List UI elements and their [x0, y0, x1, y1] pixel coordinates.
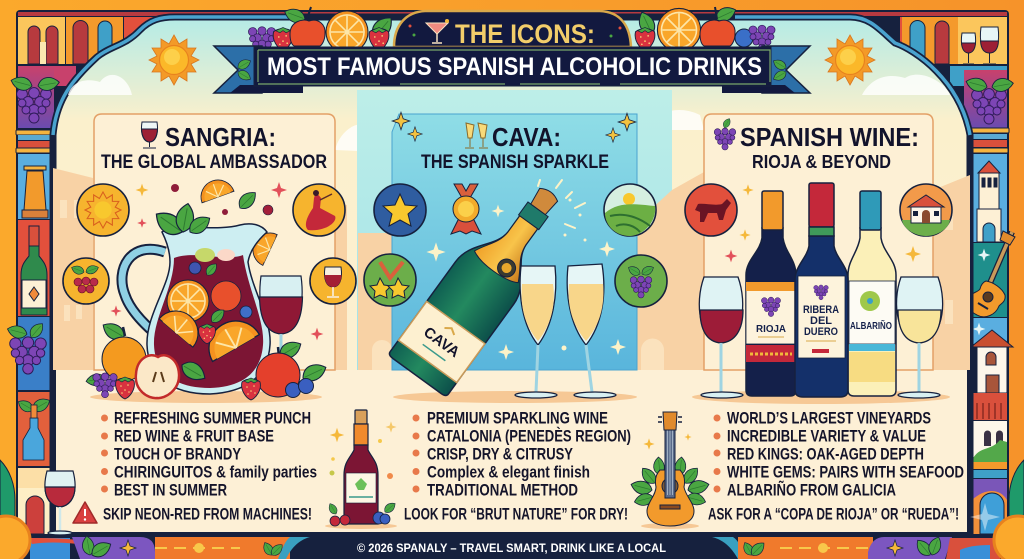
icon: badge house — [900, 184, 952, 236]
heading: spanish wine — [714, 117, 919, 172]
icon: top right wine glasses — [961, 27, 999, 64]
icon: albarino bottle — [848, 191, 896, 396]
icon: ribera bottle — [795, 183, 848, 397]
list: wine bullets — [714, 410, 964, 500]
icon: cava bottle: CAVA — [420, 324, 463, 361]
footer text: © 2026 SPANALY – TRAVEL SMART, DRINK LIKE A LOCAL — [357, 543, 666, 555]
title: ribbon banner: MOST FAMOUS SPANISH ALCOHOLIC DRINKS — [267, 53, 762, 81]
list: cava bullets: CRISP, DRY & CITRUSY — [427, 446, 573, 464]
heading: cava: THE SPANISH SPARKLE — [421, 152, 609, 173]
panel: outer decor left — [0, 460, 1024, 540]
icon: badge glass — [310, 258, 356, 304]
floor — [56, 370, 967, 532]
icon: bell tower — [977, 161, 1001, 242]
icon: fruit top left — [248, 6, 397, 54]
heading: sangria — [101, 122, 327, 173]
icon: sangria wine glass — [260, 276, 302, 352]
icon: guitar with laurels — [629, 412, 710, 529]
icon: watermark sparkle — [970, 503, 1000, 531]
icon: left wine glass — [45, 471, 75, 535]
heading: cava — [421, 122, 609, 173]
list: sangria bullets: BEST IN SUMMER — [114, 482, 227, 500]
icon: sparkles cava — [392, 112, 636, 142]
panel: sangria card — [94, 114, 335, 370]
title: top badge: THE ICONS: — [455, 19, 595, 49]
icon: column — [22, 166, 48, 218]
icon: wine sparkles — [725, 184, 921, 262]
heading: sangria: THE GLOBAL AMBASSADOR — [101, 152, 327, 173]
icon: ribera bottle: RIBERA — [803, 304, 839, 316]
icon: champagne flutes — [465, 123, 488, 148]
heading: spanish wine: RIOJA & BEYOND — [752, 152, 891, 172]
icon: fruit top right — [635, 4, 775, 52]
list: wine bullets: RED KINGS: OAK-AGED DEPTH — [727, 446, 924, 464]
icon: grape bunch — [714, 117, 736, 150]
panel: footer strip — [0, 535, 1024, 559]
icon: gold medal — [451, 184, 481, 234]
heading: cava: CAVA: — [492, 122, 561, 152]
icon: wine glass — [141, 122, 158, 148]
shadows — [90, 390, 950, 404]
icon: corner sun left — [0, 516, 30, 559]
panel: wine card — [704, 114, 933, 370]
icon: red arch tile — [26, 496, 44, 534]
icon: red wine glass — [699, 277, 743, 398]
list: wine bullets: WORLD’S LARGEST VINEYARDS — [727, 410, 931, 428]
callout: sangria tip: SKIP NEON-RED FROM MACHINES! — [103, 506, 312, 524]
icon: left grape tile — [9, 75, 60, 123]
icon: white wine glass — [897, 277, 943, 398]
icon: corner sun right — [994, 516, 1024, 559]
icon: green bottle — [21, 226, 47, 315]
arch trim — [53, 17, 970, 135]
icon: badge bull — [685, 184, 737, 236]
icon: cava bottle — [388, 171, 580, 397]
icon: sun left — [149, 35, 199, 85]
icon: cava spray — [538, 180, 585, 228]
icon: guitar sparkles — [643, 433, 692, 450]
icon: small sangria bottle — [325, 410, 397, 529]
icon: rioja bottle — [746, 191, 796, 396]
list: wine bullets: INCREDIBLE VARIETY & VALUE — [727, 428, 926, 446]
list: cava bullets — [412, 410, 631, 500]
panel: cava card — [392, 114, 637, 370]
list: sangria bullets — [101, 410, 317, 500]
icon: footer leaves left — [81, 535, 285, 559]
icon: warning triangle — [73, 502, 97, 523]
icon: bottle sparkles — [330, 421, 397, 479]
heading: sangria: SANGRIA: — [165, 122, 276, 152]
icon: bush and windows — [972, 430, 1007, 462]
mint leaves — [151, 202, 214, 240]
list: wine bullets: WHITE GEMS: PAIRS WITH SEAFOOD — [727, 464, 964, 482]
icon: badge berries — [63, 258, 109, 304]
callout: cava tip: LOOK FOR “BRUT NATURE” FOR DRY! — [404, 506, 628, 524]
icon: footer leaves right — [741, 535, 944, 559]
list: cava bullets: TRADITIONAL METHOD — [427, 482, 578, 500]
panel: cava background column — [357, 90, 672, 370]
list: wine bullets: ALBARIÑO FROM GALICIA — [727, 480, 896, 500]
icon: plant and blue bottle — [16, 395, 52, 460]
icon: ribera bottle: DUERO — [804, 326, 838, 338]
icon: blue arch door — [980, 493, 1004, 534]
list: sangria bullets: RED WINE & FRUIT BASE — [114, 428, 274, 446]
icon: rioja bottle: RIOJA — [756, 323, 786, 335]
icon: badge star — [374, 184, 426, 236]
list: cava bullets: CATALONIA (PENEDÈS REGION) — [427, 426, 631, 446]
list: sangria bullets: CHIRINGUITOS & family parties — [114, 464, 317, 482]
icon: cocktail glass — [426, 19, 449, 43]
list: sangria bullets: TOUCH OF BRANDY — [114, 446, 241, 464]
icon: sun right — [825, 35, 875, 85]
buildings windows — [60, 200, 953, 370]
list: sangria bullets: REFRESHING SUMMER PUNCH — [114, 410, 311, 428]
icon: ribera bottle: DEL — [810, 315, 832, 327]
list: cava bullets: PREMIUM SPARKLING WINE — [427, 410, 608, 428]
icon: cava sparkles — [426, 198, 626, 360]
icon: badge vineyard — [604, 184, 656, 236]
icon: flute right — [567, 264, 616, 398]
icon: left lower grapes — [6, 320, 46, 374]
icon: house with red roof — [971, 330, 1013, 393]
panel: clouds — [68, 75, 950, 152]
icon: badge flamenco dancer — [293, 184, 345, 236]
icon: fruit pile right — [242, 338, 329, 400]
icon: guitar — [968, 231, 1015, 317]
sangria decorations — [110, 175, 323, 340]
list: cava bullets: Complex & elegant finish — [427, 464, 590, 482]
icon: flute left — [515, 266, 557, 398]
icon: right grape tile — [964, 76, 1014, 124]
icon: badge green grapes — [615, 255, 667, 307]
icon: badge two stars — [364, 254, 416, 306]
panel: peach buildings — [53, 168, 970, 370]
icon: sangria pitcher — [122, 202, 270, 394]
icon: badge sun — [77, 184, 129, 236]
heading: spanish wine: SPANISH WINE: — [740, 122, 919, 152]
title: top badge — [394, 11, 631, 49]
icon: albarino bottle: ALBARIÑO — [850, 319, 892, 332]
icon: fruit pile left — [85, 319, 179, 399]
title: ribbon banner — [214, 46, 810, 93]
